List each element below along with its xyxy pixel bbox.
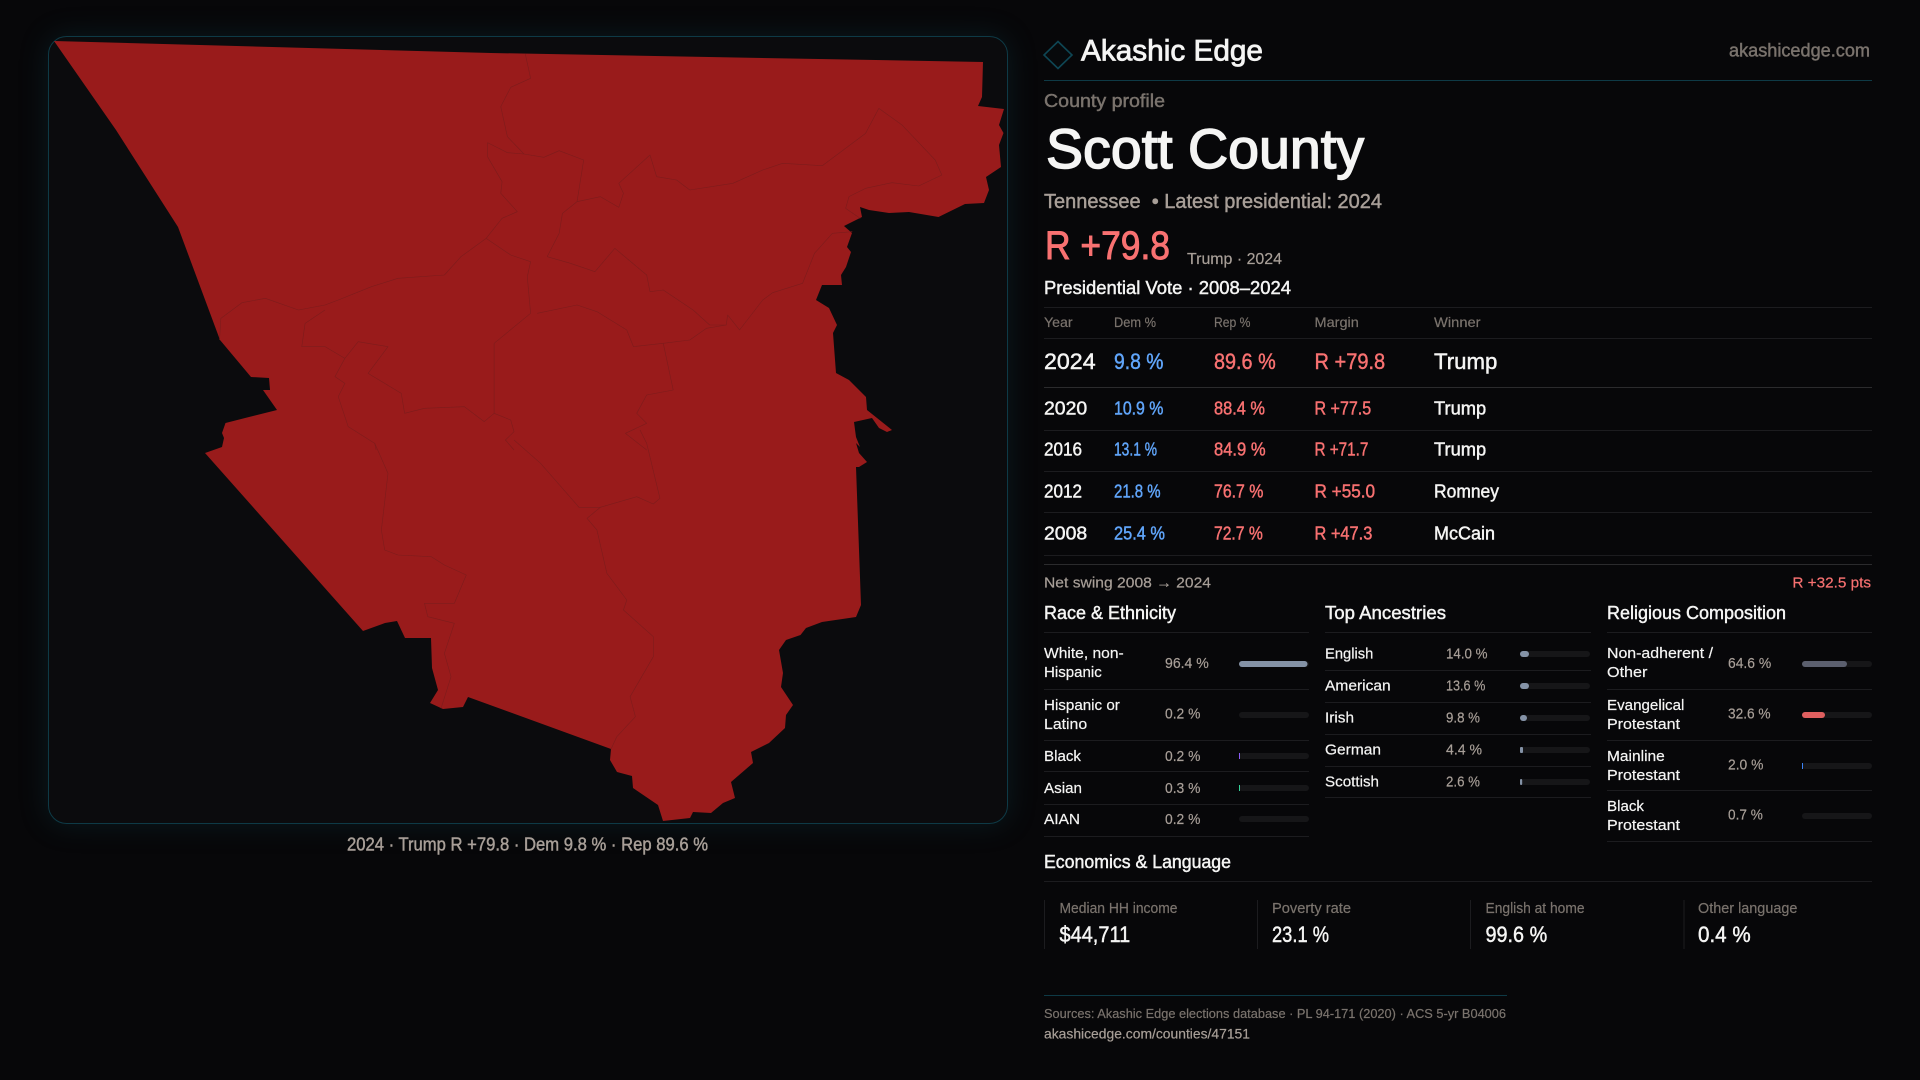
headline margin: Trump · 2024 xyxy=(1187,251,1282,268)
row 2020: Trump xyxy=(1434,398,1486,418)
heading: Religious Composition xyxy=(1607,603,1786,623)
row: irish: 9.8 % xyxy=(1446,710,1480,726)
row: american: American xyxy=(1325,678,1391,694)
heading: Economics & Language xyxy=(1044,852,1231,872)
row: german xyxy=(1325,742,1590,758)
row: hispanic: Latino xyxy=(1044,716,1087,733)
row: non-adherent: Other xyxy=(1607,664,1647,681)
row 2024: 9.8 % xyxy=(1114,349,1163,374)
row: black: 0.2 % xyxy=(1165,748,1200,765)
row 2016: R +71.7 xyxy=(1314,440,1368,460)
row: german: 4.4 % xyxy=(1446,742,1482,758)
row: asian: 0.3 % xyxy=(1165,780,1200,797)
row 2008: 25.4 % xyxy=(1114,524,1165,544)
map caption: 2024 · Trump R +79.8 · Dem 9.8 % · Rep 89.6 % xyxy=(347,834,708,854)
subtitle: Tennessee • Latest presidential: 2024 xyxy=(1044,191,1382,213)
row: evangelical: Evangelical xyxy=(1607,697,1684,714)
header: brand xyxy=(1044,34,1872,80)
row 2024: Trump xyxy=(1434,349,1497,374)
panel: economics and language xyxy=(1044,852,1872,949)
table header xyxy=(1044,314,1481,330)
table header: Winner xyxy=(1434,314,1481,330)
row 2008 xyxy=(1044,524,1495,544)
stat: median income xyxy=(1044,900,1178,949)
row 2024: R +79.8 xyxy=(1314,349,1385,374)
row 2024 xyxy=(1044,349,1497,374)
table header: Dem % xyxy=(1114,314,1156,330)
stat: poverty rate: 23.1 % xyxy=(1272,922,1329,947)
row: evangelical xyxy=(1607,697,1872,733)
row: black protestant: Protestant xyxy=(1607,817,1681,834)
row 2024: 89.6 % xyxy=(1214,349,1276,374)
row: irish xyxy=(1325,710,1590,726)
row: asian xyxy=(1044,780,1309,797)
row 2020 xyxy=(1044,398,1486,418)
row 2012: 21.8 % xyxy=(1114,482,1161,502)
row 2020: 2020 xyxy=(1044,398,1087,418)
stat: english at home xyxy=(1470,900,1584,949)
icon: diamond logo xyxy=(1044,42,1072,68)
row 2008: 72.7 % xyxy=(1214,524,1263,544)
row 2016: Trump xyxy=(1434,440,1486,460)
title: Scott County xyxy=(1046,117,1364,180)
stat: median income: $44,711 xyxy=(1060,922,1130,947)
row 2008: McCain xyxy=(1434,524,1495,544)
row: black protestant: Black xyxy=(1607,798,1644,815)
row: white xyxy=(1044,645,1309,681)
heading: Top Ancestries xyxy=(1325,603,1446,623)
row: scottish xyxy=(1325,774,1590,790)
row 2016 xyxy=(1044,440,1486,460)
row: black protestant xyxy=(1607,798,1872,834)
row 2024: 2024 xyxy=(1044,349,1096,374)
row: hispanic: Hispanic or xyxy=(1044,697,1120,714)
table header: Rep % xyxy=(1214,314,1250,330)
row: evangelical: Protestant xyxy=(1607,716,1681,733)
net swing xyxy=(1044,574,1871,592)
row 2016: 13.1 % xyxy=(1114,440,1157,460)
row 2016: 2016 xyxy=(1044,440,1082,460)
row: american xyxy=(1325,678,1590,694)
row: english xyxy=(1325,646,1590,662)
row: mainline: 2.0 % xyxy=(1728,756,1763,774)
row: scottish: 2.6 % xyxy=(1446,774,1480,790)
stat: english at home: 99.6 % xyxy=(1486,922,1547,947)
map: Scott County precincts xyxy=(54,41,1004,821)
stat: other language: 0.4 % xyxy=(1698,922,1751,947)
row: non-adherent: 64.6 % xyxy=(1728,655,1771,672)
row: white: 96.4 % xyxy=(1165,655,1209,672)
row: aian: 0.2 % xyxy=(1165,811,1200,828)
stat: poverty rate xyxy=(1258,900,1351,949)
row: american: 13.6 % xyxy=(1446,678,1485,694)
row: hispanic xyxy=(1044,697,1309,733)
heading: Race & Ethnicity xyxy=(1044,603,1176,623)
panel: race and ethnicity xyxy=(1044,603,1309,836)
row: english: English xyxy=(1325,646,1373,662)
footer: sources xyxy=(1044,996,1507,1042)
row: mainline xyxy=(1607,748,1872,784)
row 2012: Romney xyxy=(1434,482,1499,502)
brand name: Akashic Edge xyxy=(1081,34,1263,68)
row: aian: AIAN xyxy=(1044,811,1080,828)
row: mainline: Protestant xyxy=(1607,767,1681,784)
row: non-adherent xyxy=(1607,645,1872,681)
row: german: German xyxy=(1325,742,1381,758)
row: black: Black xyxy=(1044,748,1081,765)
row 2008: 2008 xyxy=(1044,524,1087,544)
row: white: White, non- xyxy=(1044,645,1124,662)
row: white: Hispanic xyxy=(1044,664,1102,681)
headline margin xyxy=(1045,224,1282,268)
headline margin: R +79.8 xyxy=(1045,224,1170,268)
row: asian: Asian xyxy=(1044,780,1082,797)
stat: median income: Median HH income xyxy=(1060,901,1178,917)
stat: poverty rate: Poverty rate xyxy=(1272,901,1351,917)
row: black xyxy=(1044,748,1309,765)
panel: county map xyxy=(48,36,1008,824)
row: hispanic: 0.2 % xyxy=(1165,706,1200,722)
stat: other language: Other language xyxy=(1698,901,1797,917)
row 2008: R +47.3 xyxy=(1314,524,1372,544)
table header: Year xyxy=(1044,314,1073,330)
net swing: Net swing 2008 → 2024 xyxy=(1044,574,1211,592)
row: scottish: Scottish xyxy=(1325,774,1379,790)
row: english: 14.0 % xyxy=(1446,646,1488,662)
stat: english at home: English at home xyxy=(1486,901,1584,917)
footer: sources: Sources: Akashic Edge elections database · PL 94-171 (2020) · ACS 5-yr B04006 xyxy=(1044,1006,1506,1021)
row 2016: 84.9 % xyxy=(1214,440,1266,460)
row: evangelical: 32.6 % xyxy=(1728,706,1771,722)
row 2012: 2012 xyxy=(1044,482,1082,502)
row 2020: 88.4 % xyxy=(1214,398,1265,418)
row: irish: Irish xyxy=(1325,710,1354,726)
panel: top ancestries xyxy=(1325,603,1591,798)
table header: Margin xyxy=(1314,314,1359,330)
row: non-adherent: Non-adherent / xyxy=(1607,645,1714,662)
stat: other language xyxy=(1684,900,1797,949)
row 2012: 76.7 % xyxy=(1214,482,1263,502)
row: aian xyxy=(1044,811,1309,828)
section heading: presidential vote: Presidential Vote · 2008–2024 xyxy=(1044,278,1291,298)
website: akashicedge.com xyxy=(1729,40,1870,60)
footer: sources: akashicedge.com/counties/47151 xyxy=(1044,1026,1250,1042)
table: presidential vote xyxy=(1044,308,1872,564)
eyebrow: County profile xyxy=(1044,91,1165,111)
row: mainline: Mainline xyxy=(1607,748,1665,765)
row 2012 xyxy=(1044,482,1499,502)
row 2020: R +77.5 xyxy=(1314,398,1371,418)
row 2012: R +55.0 xyxy=(1314,482,1375,502)
net swing: R +32.5 pts xyxy=(1792,574,1871,592)
row: black protestant: 0.7 % xyxy=(1728,806,1763,824)
row 2020: 10.9 % xyxy=(1114,398,1163,418)
panel: religious composition xyxy=(1607,603,1872,842)
